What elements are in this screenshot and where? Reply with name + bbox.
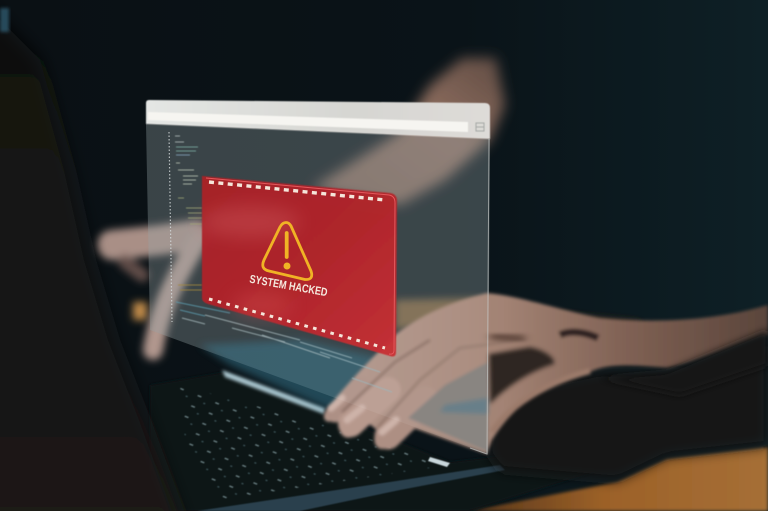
finger D ridge bbox=[492, 371, 590, 432]
card highlight cloud bbox=[200, 206, 300, 238]
card body bbox=[202, 176, 397, 356]
laptop body bbox=[150, 370, 640, 511]
code lines bbox=[175, 136, 392, 392]
wooden table foreground bbox=[470, 447, 768, 511]
dark gap beneath fingers bbox=[489, 347, 554, 404]
glass browser window bbox=[146, 100, 490, 454]
bottom dashes bbox=[209, 299, 385, 348]
wrist lower fade bbox=[600, 330, 768, 395]
fingertip B bbox=[351, 390, 388, 424]
fingertip C bbox=[388, 400, 425, 436]
card outline bbox=[206, 178, 395, 354]
fingertip A bbox=[335, 386, 362, 413]
finger separator A/B bbox=[342, 340, 430, 412]
shadow below wrist bbox=[488, 345, 768, 480]
dark foreground laptop screen back bbox=[0, 0, 185, 511]
knuckle shadow bbox=[560, 332, 598, 338]
blurred wood table behind hands bbox=[133, 298, 640, 330]
browser menu icon bbox=[476, 123, 484, 131]
warning triangle icon bbox=[263, 222, 312, 280]
foreground arm and typing hand bbox=[324, 293, 768, 454]
browser title bar bbox=[146, 100, 490, 139]
blurred forearm behind the panel bbox=[312, 58, 505, 205]
keyboard keys bbox=[180, 385, 450, 500]
glass right edge bbox=[470, 139, 489, 454]
glass sheen bbox=[146, 124, 490, 454]
glass panel background tint bbox=[146, 124, 490, 454]
finger separator B/C bbox=[377, 340, 525, 428]
finger C underside seen through glass bbox=[408, 362, 488, 452]
teal reflection on finger bbox=[440, 398, 488, 414]
browser address bar bbox=[148, 112, 468, 132]
screen hinge highlight bbox=[222, 370, 325, 414]
card lower glow bbox=[232, 291, 292, 319]
red alert card bbox=[200, 176, 397, 356]
code column: line numbers bbox=[169, 132, 172, 322]
blurred left hand bbox=[112, 235, 198, 350]
finger tips highlight bbox=[331, 398, 396, 432]
hand silhouette bbox=[324, 293, 768, 454]
alert label: SYSTEM HACKED bbox=[248, 274, 328, 299]
teal reflection lower panel bbox=[200, 340, 397, 410]
knuckle shading bbox=[490, 335, 525, 340]
laptop front edge bbox=[197, 465, 505, 511]
top dashes bbox=[209, 182, 385, 200]
